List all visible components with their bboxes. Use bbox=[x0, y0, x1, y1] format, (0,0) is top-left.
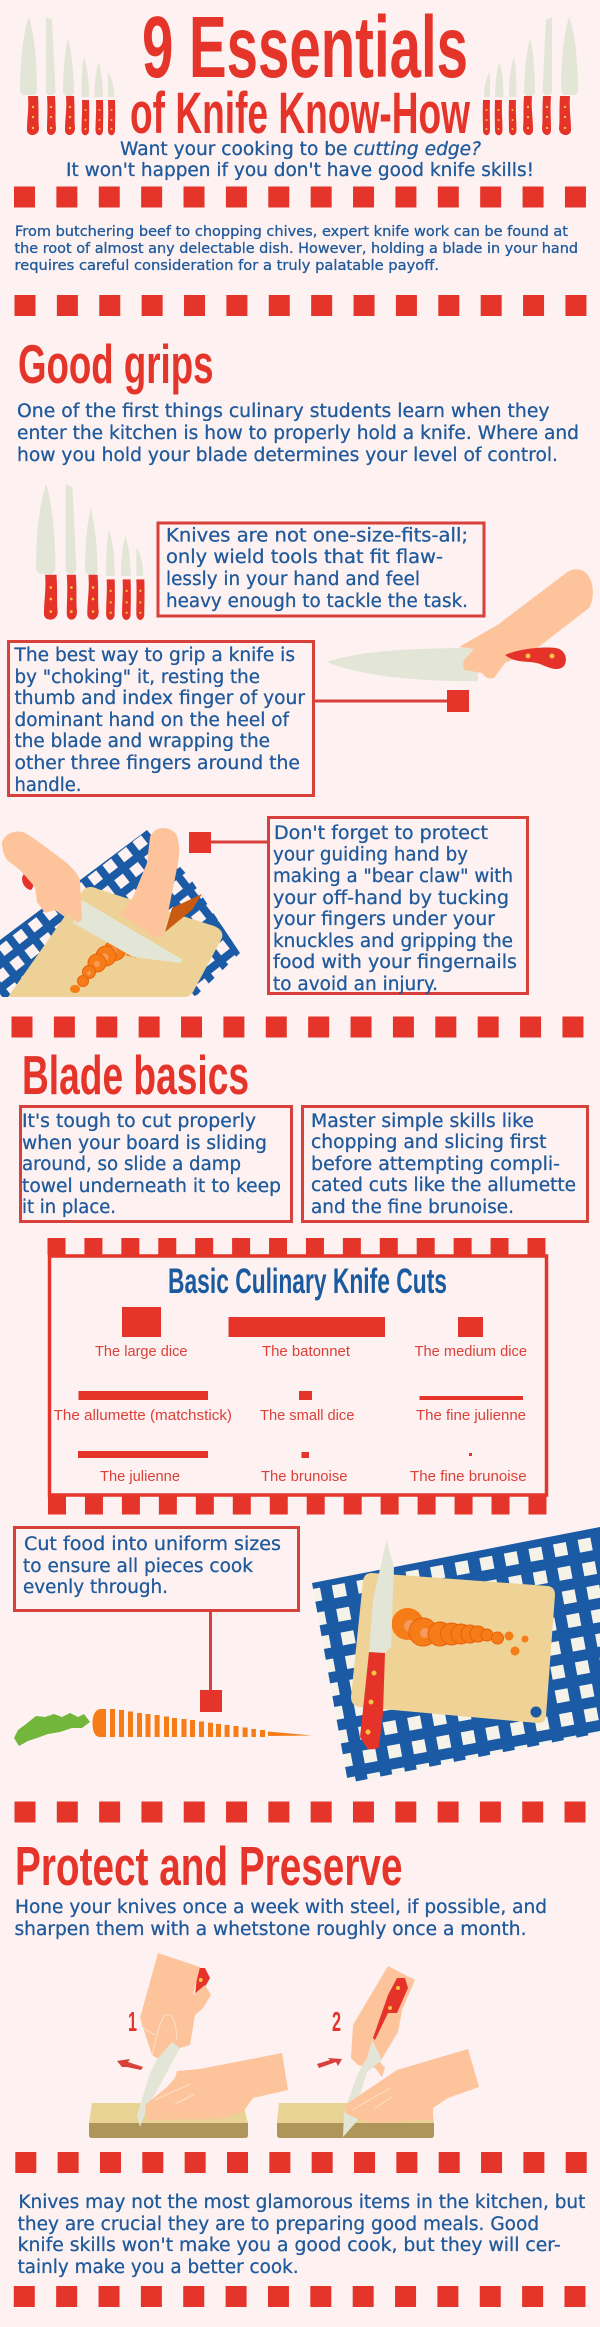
divider row bbox=[14, 186, 586, 208]
cut: allumette bbox=[54, 1391, 232, 1424]
good grips paragraph: One of the first things culinary students learn when they bbox=[17, 401, 550, 422]
callout: damp towel bbox=[20, 1106, 292, 1222]
illustration: honing step 2 bbox=[277, 1966, 479, 2138]
callout: choking the knife: other three fingers around the bbox=[14, 753, 300, 774]
protect paragraph: sharpen them with a whetstone roughly once a month. bbox=[14, 1919, 526, 1940]
callout: bear claw bbox=[268, 818, 528, 995]
divider row bbox=[14, 1802, 586, 1822]
cut: medium dice: The medium dice bbox=[414, 1343, 527, 1360]
cut: large dice: The large dice bbox=[95, 1343, 188, 1360]
connector arrow: uniform sizes to carrot bbox=[200, 1611, 222, 1712]
subtitle line 2: It won't happen if you don't have good knife skills! bbox=[66, 159, 534, 181]
protect paragraph: Hone your knives once a week with steel, if possible, and bbox=[15, 1897, 547, 1918]
callout: damp towel: it in place. bbox=[22, 1197, 116, 1218]
divider row bbox=[14, 2286, 586, 2307]
closing paragraph: knife skills won't make you a good cook, but they will cer- bbox=[18, 2235, 561, 2256]
callout: choking the knife: dominant hand on the heel of bbox=[14, 710, 289, 731]
divider row bbox=[12, 1016, 584, 1038]
cut: small dice bbox=[260, 1391, 354, 1424]
cut: brunoise: The brunoise bbox=[261, 1468, 348, 1485]
closing paragraph: they are crucial they are to preparing good meals. Good bbox=[18, 2214, 539, 2235]
good grips paragraph: how you hold your blade determines your level of control. bbox=[17, 445, 558, 466]
callout: bear claw: food with your fingernails bbox=[273, 952, 517, 973]
cut: julienne bbox=[78, 1451, 208, 1485]
step number 2: 2 bbox=[332, 2006, 341, 2037]
callout: bear claw: your fingers under your bbox=[273, 909, 495, 930]
callout: master simple skills: before attempting compli- bbox=[311, 1154, 560, 1175]
icon: knife set right of title bbox=[483, 17, 578, 135]
callout: choking the knife: by "choking" it, resting the bbox=[14, 667, 260, 688]
cut: fine brunoise bbox=[410, 1453, 527, 1485]
panel: basic culinary knife cuts bbox=[48, 1246, 546, 1505]
callout: one-size-fits-all: lessly in your hand and feel bbox=[166, 569, 420, 590]
cut: fine julienne: The fine julienne bbox=[416, 1407, 526, 1424]
callout: bear claw: your guiding hand by bbox=[273, 844, 468, 866]
callout: choking the knife: the blade and wrapping the bbox=[14, 731, 270, 752]
cut: fine brunoise: The fine brunoise bbox=[410, 1468, 527, 1485]
callout: uniform sizes: to ensure all pieces cook bbox=[23, 1556, 253, 1577]
callout: damp towel: towel underneath it to keep bbox=[22, 1176, 281, 1197]
cut: medium dice bbox=[414, 1317, 527, 1360]
callout: damp towel: when your board is sliding bbox=[22, 1133, 267, 1154]
callout: damp towel: It's tough to cut properly bbox=[22, 1111, 256, 1132]
cut: batonnet bbox=[228, 1317, 385, 1360]
divider row bbox=[14, 295, 586, 316]
icon: cutting board with knife and carrot bbox=[312, 1527, 600, 1783]
cut: brunoise bbox=[261, 1452, 348, 1485]
intro text bbox=[14, 224, 578, 274]
protect paragraph bbox=[14, 1897, 547, 1940]
closing paragraph bbox=[18, 2192, 585, 2278]
connector arrow: grip callout to hand bbox=[314, 690, 469, 712]
callout: bear claw: to avoid an injury. bbox=[273, 974, 438, 995]
cut: fine julienne bbox=[416, 1396, 526, 1424]
divider row bbox=[15, 2152, 587, 2173]
callout: master simple skills: and the fine brunoise. bbox=[311, 1197, 514, 1218]
cut: large dice bbox=[95, 1307, 188, 1360]
callout: damp towel: around, so slide a damp bbox=[22, 1154, 241, 1175]
intro text: requires careful consideration for a truly palatable payoff. bbox=[14, 258, 439, 274]
arrow: motion left bbox=[117, 2059, 143, 2070]
callout: uniform sizes bbox=[14, 1528, 298, 1610]
callout: master simple skills: Master simple skills like bbox=[311, 1111, 534, 1132]
subtitle line 1: Want your cooking to be cutting edge? bbox=[120, 138, 481, 160]
icon: knife set bbox=[36, 484, 145, 620]
callout: master simple skills bbox=[302, 1106, 588, 1222]
callout: one-size-fits-all: heavy enough to tackle the task. bbox=[166, 591, 468, 612]
callout: one-size-fits-all: only wield tools that fit flaw- bbox=[166, 547, 443, 568]
illustration: honing step 1 bbox=[89, 1953, 288, 2138]
callout: one-size-fits-all: Knives are not one-size-fits-all; bbox=[166, 526, 468, 546]
intro text: From butchering beef to chopping chives, expert knife work can be found at bbox=[15, 224, 568, 240]
icon: sliced carrot bbox=[14, 1709, 312, 1746]
callout: bear claw: your off-hand by tucking bbox=[273, 888, 509, 909]
closing paragraph: Knives may not the most glamorous items in the kitchen, but bbox=[18, 2192, 585, 2213]
callout: bear claw: knuckles and gripping the bbox=[273, 931, 513, 952]
good grips paragraph: enter the kitchen is how to properly hold a knife. Where and bbox=[17, 423, 579, 444]
table title: Basic Culinary Knife Cuts bbox=[168, 1262, 447, 1301]
cut: julienne: The julienne bbox=[100, 1468, 180, 1485]
callout: choking the knife: The best way to grip a knife is bbox=[13, 645, 295, 666]
icon: bear claw chopping illustration bbox=[0, 828, 240, 997]
callout: bear claw: making a "bear claw" with bbox=[273, 866, 513, 887]
callout: bear claw: Don't forget to protect bbox=[274, 823, 488, 844]
callout: master simple skills: chopping and slicing first bbox=[311, 1132, 546, 1153]
intro text: the root of almost any delectable dish. However, holding a blade in your hand bbox=[14, 241, 578, 257]
step number 1: 1 bbox=[128, 2006, 137, 2037]
icon: knife set left of title bbox=[20, 17, 115, 135]
callout: uniform sizes: evenly through. bbox=[23, 1577, 168, 1598]
callout: master simple skills: cated cuts like the allumette bbox=[311, 1175, 576, 1196]
callout: one-size-fits-all bbox=[158, 523, 484, 616]
heading: Good grips: Good grips bbox=[18, 333, 214, 395]
heading: Protect and Preserve: Protect and Preserve bbox=[15, 1835, 402, 1897]
closing paragraph: tainly make you a better cook. bbox=[18, 2257, 299, 2278]
cut: small dice: The small dice bbox=[260, 1407, 354, 1424]
cut: batonnet: The batonnet bbox=[262, 1343, 351, 1360]
cut: allumette: The allumette (matchstick) bbox=[54, 1407, 232, 1424]
connector arrow: bear claw callout bbox=[189, 832, 268, 853]
callout: choking the knife: handle. bbox=[14, 775, 82, 796]
arrow: motion right bbox=[317, 2058, 342, 2068]
good grips paragraph bbox=[17, 401, 579, 466]
callout: choking the knife bbox=[8, 642, 314, 796]
heading: Blade basics: Blade basics bbox=[22, 1044, 249, 1106]
callout: choking the knife: thumb and index finger of your bbox=[14, 688, 305, 709]
callout: uniform sizes: Cut food into uniform sizes bbox=[24, 1534, 281, 1555]
icon: hand gripping knife bbox=[327, 569, 593, 681]
